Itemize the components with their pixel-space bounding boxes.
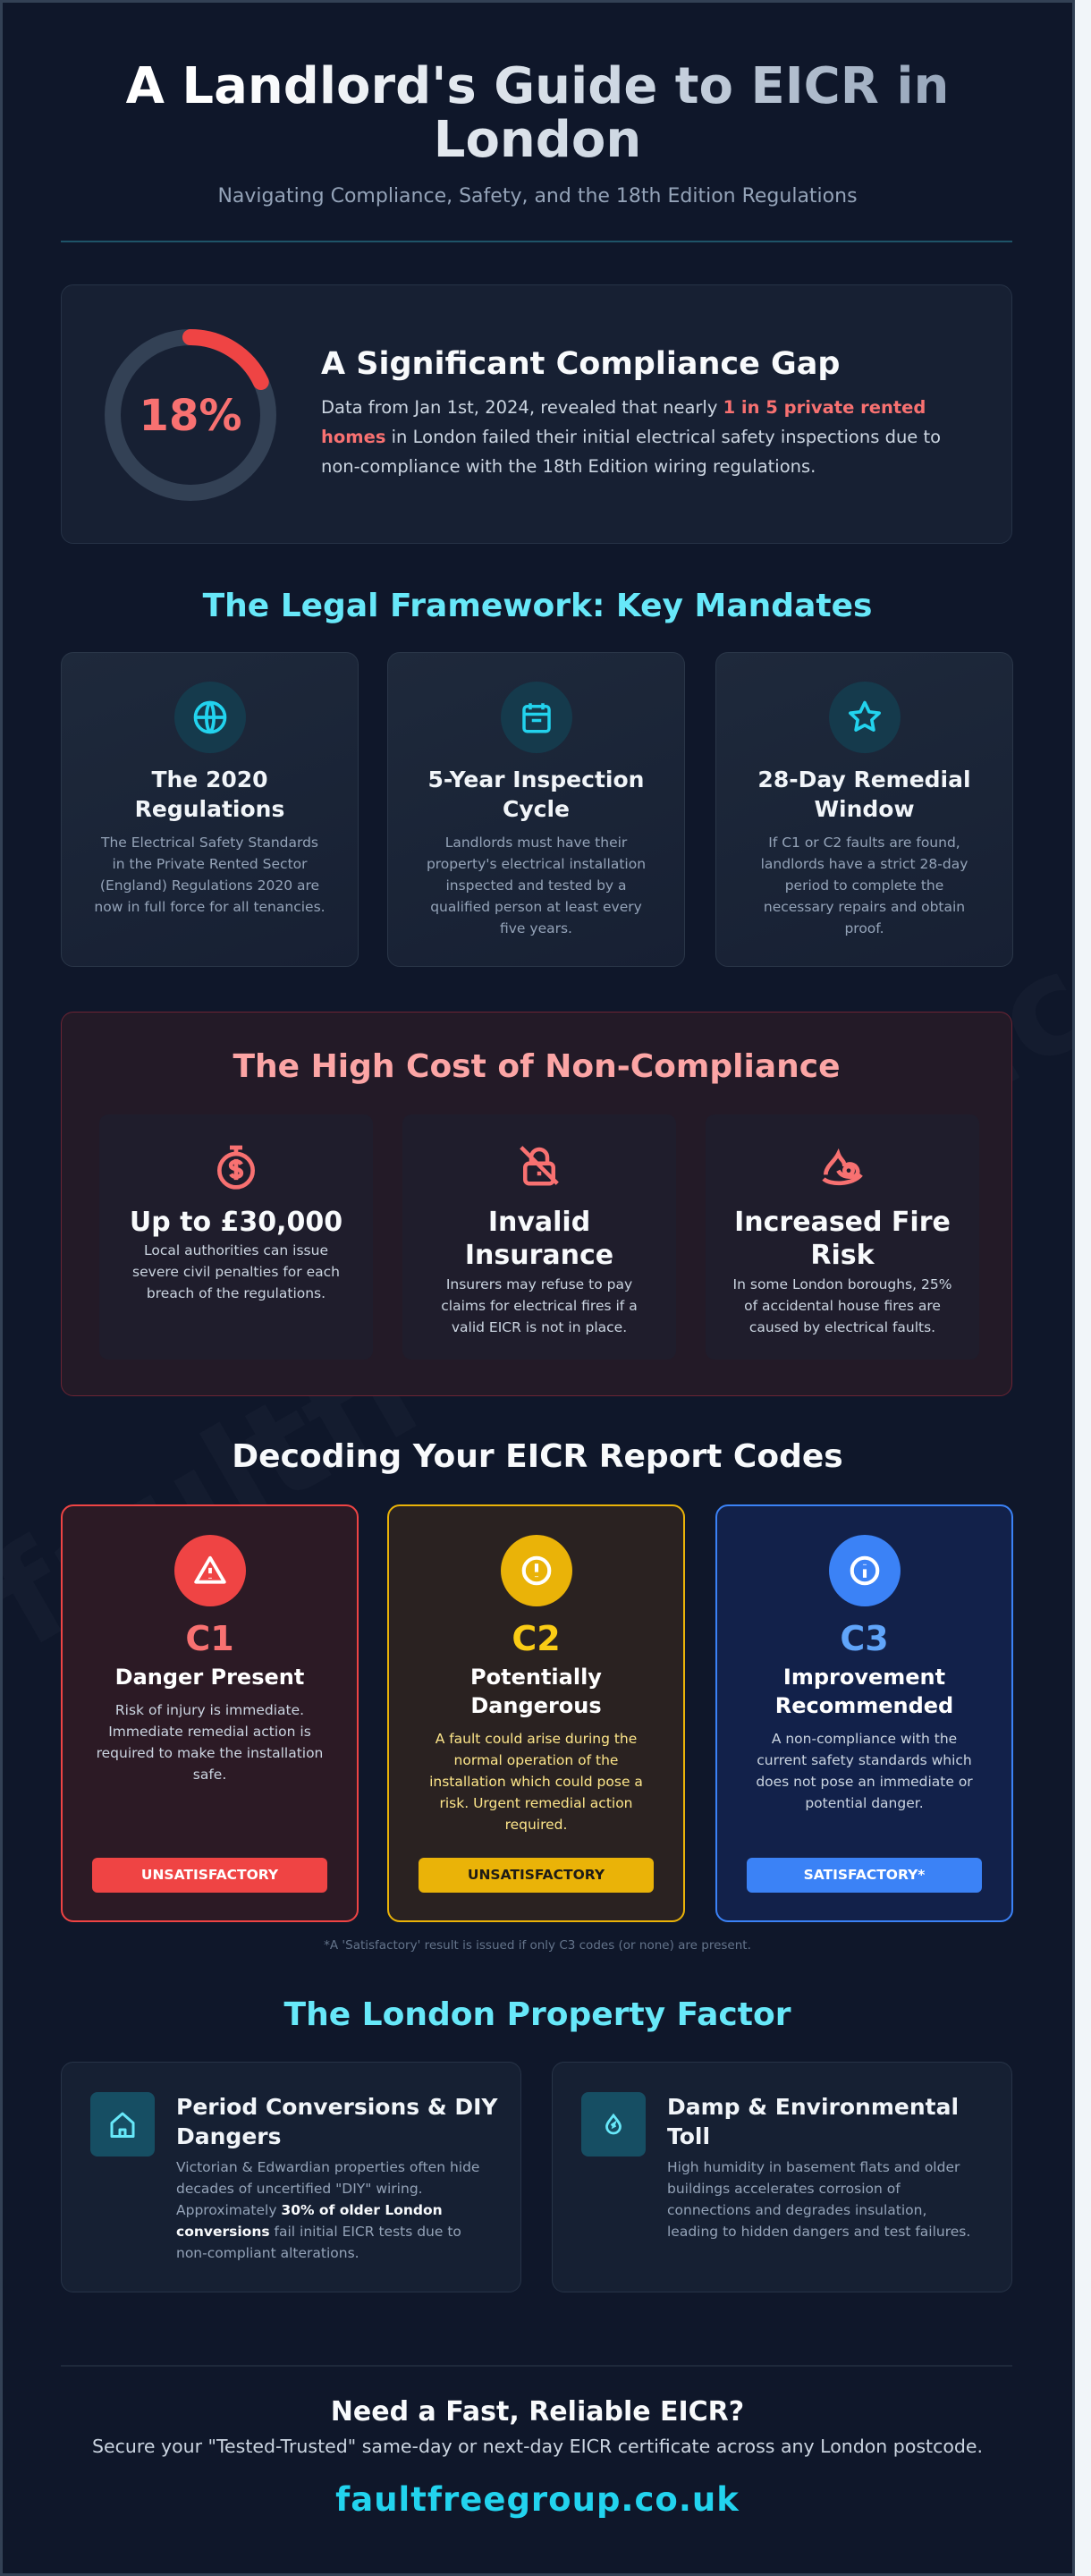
heading: legal framework: The Legal Framework: Key Mandates (203, 588, 872, 624)
card: C2: Dangerous (470, 1693, 602, 1718)
card: C2 (387, 1504, 685, 1922)
footnote: *A 'Satisfactory' result is issued if only C3 codes (or none) are present. (324, 1938, 751, 1953)
card: fine: Up to £30,000 (130, 1207, 343, 1238)
card: C3 (715, 1504, 1013, 1922)
card: fire risk: Risk (810, 1240, 875, 1271)
stat text: Data from Jan 1st, 2024, revealed that nearly 1 in 5 private rented homes in London failed their initial electrical safety inspections due to non-compliance with the 18th Edition wiring regulations. (321, 397, 941, 477)
card: period conversions (61, 2062, 521, 2292)
card: insurance (402, 1114, 676, 1360)
icon: warning (174, 1535, 246, 1606)
card: insurance: Insurers may refuse to pay claims for electrical fires if a valid EICR is not in place. (441, 1276, 638, 1335)
icon: star (829, 682, 901, 753)
icon: droplet (581, 2092, 646, 2157)
icon: house (90, 2092, 155, 2157)
card: 5-year cycle: Cycle (503, 796, 570, 822)
card: period conversions: Victorian & Edwardian properties often hide decades of uncertified "DIY" wiring. Approximately 30% of older London conversions fail initial EICR tests due to non-compliant alterations. (176, 2159, 479, 2261)
card: C2: C2 (512, 1619, 561, 1658)
icon: fire (822, 1148, 863, 1186)
heading: decoding codes: Decoding Your EICR Report Codes (232, 1438, 843, 1475)
stat heading: A Significant Compliance Gap (321, 346, 840, 382)
card: 28-day window: Window (814, 796, 915, 822)
card: fire risk: Increased Fire (734, 1207, 951, 1238)
icon: exclamation (501, 1535, 572, 1606)
title: A Landlord's Guide to EICR in (126, 57, 949, 115)
card: 2020 regulations (61, 652, 359, 967)
heading: london property factor: The London Property Factor (284, 1996, 791, 2033)
card: damp: Damp & Environmental Toll (667, 2094, 959, 2149)
card: insurance: Invalid (488, 1207, 590, 1238)
card: C1: Risk of injury is immediate. Immediate remedial action is required to make the installation safe. (97, 1702, 323, 1783)
card: 28-day window: 28-Day Remedial (757, 767, 971, 792)
CTA text: Secure your "Tested-Trusted" same-day or next-day EICR certificate across any London postcode. (92, 2436, 983, 2457)
card: C3: C3 (840, 1619, 889, 1658)
card: C1: C1 (185, 1619, 234, 1658)
card: 2020 regulations: The Electrical Safety Standards in the Private Rented Sector (England) Regulations 2020 are now in full force for all tenancies. (94, 835, 326, 915)
card: C1 (61, 1504, 359, 1922)
card: C3: A non-compliance with the current safety standards which does not pose an immediate or potential danger. (756, 1731, 973, 1811)
card: C2: UNSATISFACTORY (468, 1867, 605, 1883)
card: damp (552, 2062, 1012, 2292)
card: 5-year cycle: 5-Year Inspection (428, 767, 644, 792)
CTA heading: Need a Fast, Reliable EICR? (331, 2396, 744, 2428)
card: C3: SATISFACTORY* (804, 1867, 925, 1883)
card: C2: A fault could arise during the normal operation of the installation which could pose a risk. Urgent remedial action required. (429, 1731, 643, 1833)
card: C1: UNSATISFACTORY (141, 1867, 278, 1883)
icon: money bag (217, 1145, 255, 1190)
card: 28-day window: If C1 or C2 faults are found, landlords have a strict 28-day period to complete the necessary repairs and obtain proof. (761, 835, 968, 936)
card: C1: Danger Present (115, 1665, 304, 1690)
card: 5-year cycle: Landlords must have their property's electrical installation inspected and tested by a qualified person at least every five years. (427, 835, 646, 936)
card: fire risk (706, 1114, 979, 1360)
CTA url: faultfreegroup.co.uk (335, 2480, 740, 2519)
title: London (434, 111, 641, 169)
heading: The High Cost of Non-Compliance (233, 1048, 841, 1085)
donut chart (105, 329, 276, 501)
icon: info (829, 1535, 901, 1606)
title (3, 60, 1072, 167)
icon: lock off (520, 1146, 559, 1186)
card: fire risk: In some London boroughs, 25% of accidental house fires are caused by electrical faults. (733, 1276, 951, 1335)
panel: cost of non-compliance (61, 1012, 1012, 1396)
card: 5-year cycle (387, 652, 685, 967)
subtitle: Navigating Compliance, Safety, and the 18th Edition Regulations (217, 185, 858, 208)
card: damp: High humidity in basement flats and older buildings accelerates corrosion of connections and degrades insulation, leading to hidden dangers and test failures. (667, 2159, 970, 2240)
card: fine: Local authorities can issue severe civil penalties for each breach of the regulations. (132, 1242, 340, 1301)
card: C3: Improvement (783, 1665, 945, 1690)
card: C2: Potentially (470, 1665, 602, 1690)
icon: globe (174, 682, 246, 753)
stat panel (61, 284, 1012, 544)
card: C3: Recommended (775, 1693, 953, 1718)
donut chart: 18% (140, 391, 241, 441)
card: 28-day window (715, 652, 1013, 967)
card: period conversions: Period Conversions & DIY Dangers (176, 2094, 498, 2149)
card: fine (99, 1114, 373, 1360)
card: 2020 regulations: Regulations (135, 796, 284, 822)
card: 2020 regulations: The 2020 (151, 767, 268, 792)
card: insurance: Insurance (465, 1240, 613, 1271)
icon: calendar (501, 682, 572, 753)
